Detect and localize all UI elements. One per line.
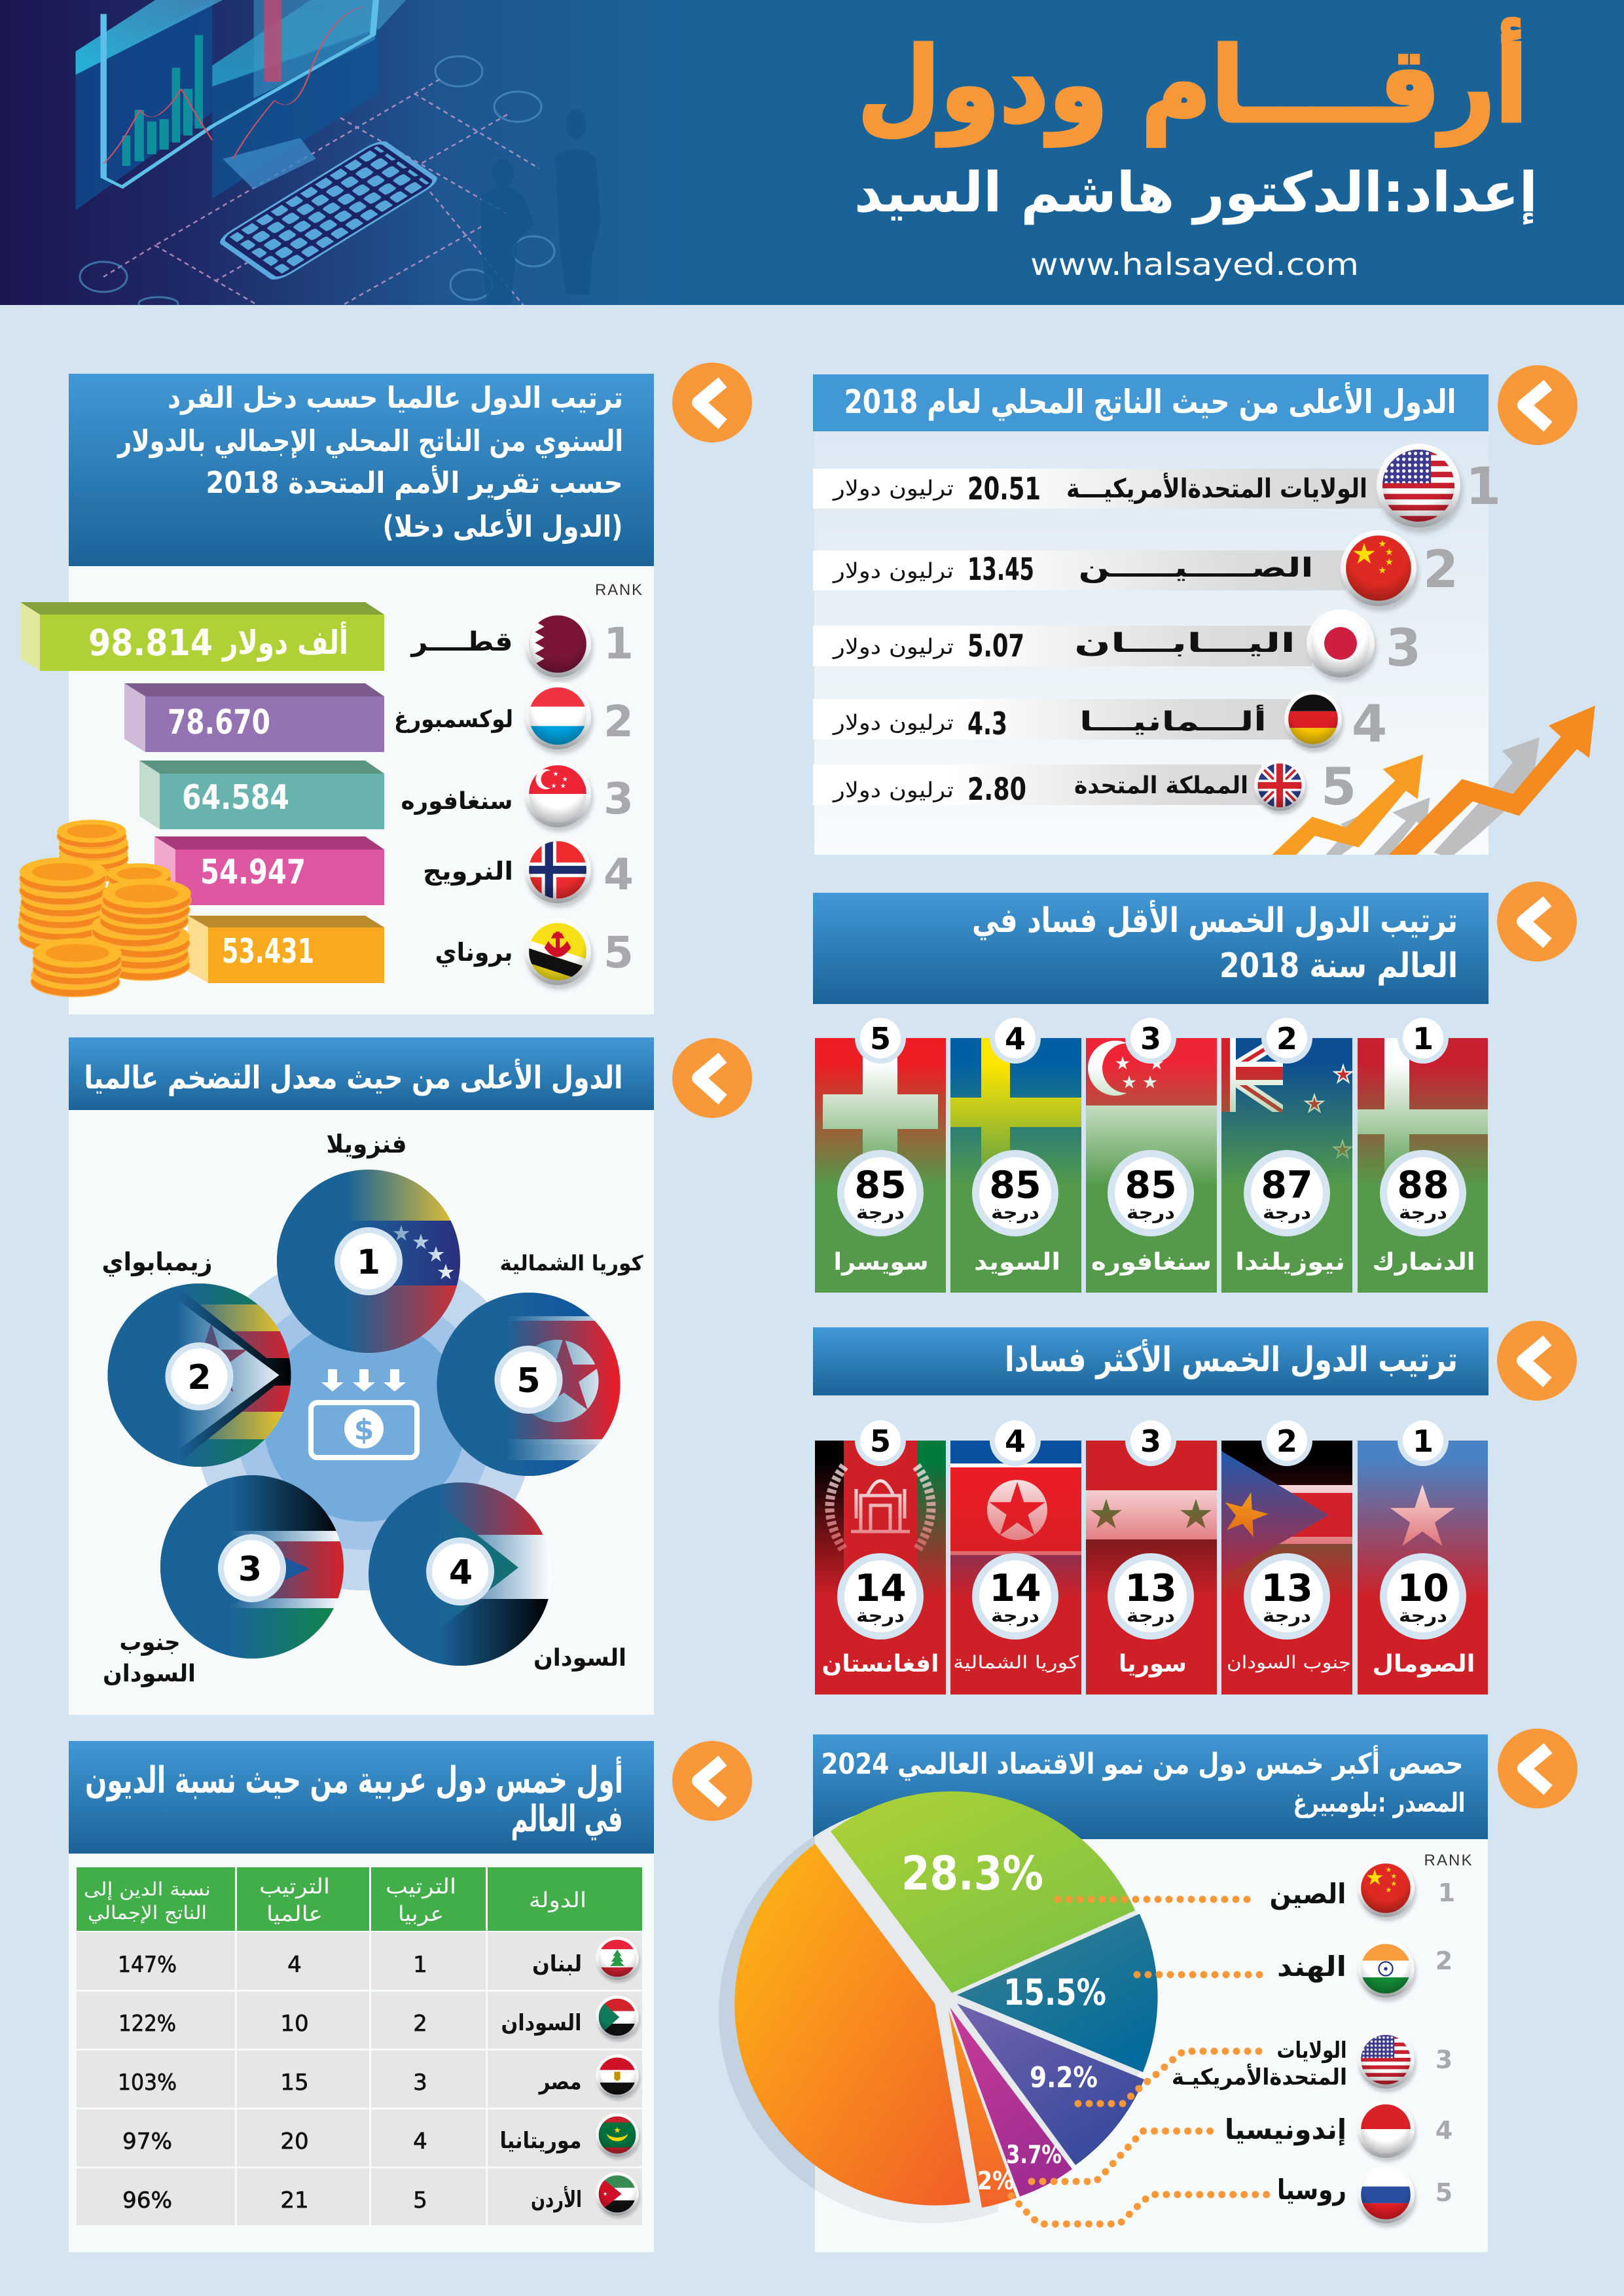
- table header: عالميا: [266, 1901, 323, 1926]
- row 2: [813, 530, 1458, 611]
- label: South Sudan: [103, 1629, 196, 1687]
- row 5: [813, 758, 1356, 817]
- row 2: 13.45: [967, 552, 1034, 588]
- row: Mauritania: 20: [280, 2128, 309, 2155]
- row 2: 2: [1423, 541, 1458, 600]
- icon: chevron: [1498, 1729, 1578, 1808]
- heading: [813, 893, 1489, 1004]
- heading: الدول الأعلى من حيث الناتج المحلي لعام 2018: [844, 382, 1456, 422]
- table header: عربيا: [398, 1901, 444, 1926]
- circle: Venezuela: 1: [357, 1243, 380, 1282]
- pie chart: 9.2%: [1030, 2061, 1098, 2094]
- card: Somalia: الصومال: [1372, 1651, 1475, 1677]
- card: Afghanistan: [815, 1415, 946, 1695]
- row: Brunei: 5: [604, 927, 634, 978]
- row: Mauritania: 97%: [122, 2128, 172, 2155]
- card: Sweden: [950, 1013, 1081, 1293]
- card: Sweden: درجة: [991, 1202, 1039, 1223]
- row: Russia: [1277, 2166, 1453, 2227]
- bar: Qatar: ألف دولار: [221, 621, 348, 662]
- row: Russia: 5: [1435, 2178, 1453, 2207]
- row 4: [813, 691, 1387, 754]
- card: Sweden: 4: [1005, 1021, 1026, 1056]
- panel: Arab debt table: [69, 1741, 752, 2252]
- row: Mauritania: [77, 2109, 642, 2166]
- row: Sudan: [77, 1992, 642, 2049]
- row: Sudan: 2: [413, 2011, 427, 2037]
- panel: least corrupt: [813, 882, 1577, 1293]
- card: Sweden: 85: [989, 1164, 1041, 1207]
- row: Mauritania: 4: [413, 2128, 427, 2155]
- card: Singapore: 3: [1140, 1021, 1161, 1056]
- label: Venezuela: فنزويلا: [326, 1130, 407, 1159]
- card: Switzerland: 5: [870, 1021, 891, 1056]
- circle: Sudan: 4: [449, 1553, 473, 1592]
- bar: Singapore: [139, 761, 384, 829]
- icon: coins: [18, 819, 191, 997]
- row 2: ترليون دولار: [832, 558, 954, 583]
- card: South Sudan: درجة: [1263, 1605, 1311, 1626]
- card: New Zealand: [1221, 1013, 1352, 1293]
- heading: حصص أكبر خمس دول من نمو الاقتصاد العالمي 2024: [821, 1745, 1464, 1781]
- label: North Korea: كوريا الشمالية: [500, 1251, 643, 1276]
- row: Egypt: 15: [280, 2070, 309, 2096]
- row 4: 4: [1352, 695, 1387, 754]
- row: Jordan: 96%: [122, 2187, 172, 2214]
- row 4: ألـــمانيـــا: [1079, 704, 1267, 737]
- row: Norway: 4: [604, 850, 634, 900]
- row: Lebanon: [77, 1932, 642, 1990]
- row 1: ترليون دولار: [832, 476, 954, 501]
- bar: Brunei: 53.431: [222, 932, 314, 971]
- table header: نسبة الدين إلى: [84, 1878, 211, 1900]
- card: Syria: درجة: [1127, 1605, 1175, 1626]
- row: China: الصين: [1270, 1878, 1346, 1910]
- card: Switzerland: درجة: [856, 1202, 905, 1223]
- row 1: الولايات المتحدةالأمريكيـــة: [1066, 472, 1367, 504]
- row 5: 2.80: [967, 772, 1026, 808]
- heading: (الدول الأعلى دخلا): [382, 509, 623, 544]
- card: New Zealand: 2: [1276, 1021, 1297, 1056]
- row: Lebanon: 4: [287, 1952, 302, 1978]
- card: North Korea: [950, 1415, 1081, 1695]
- icon: chevron: [1497, 1321, 1577, 1401]
- card: Switzerland: سويسرا: [834, 1249, 928, 1276]
- card: North Korea: كوريا الشمالية: [953, 1653, 1079, 1673]
- row: Jordan: [77, 2168, 642, 2225]
- row 2: الصـــــيـــــن: [1079, 553, 1313, 583]
- label: South Sudan: جنوب: [119, 1629, 181, 1656]
- row: Egypt: مصر: [538, 2069, 581, 2095]
- row: Sudan: 10: [280, 2011, 309, 2037]
- row: India: الهند: [1277, 1950, 1346, 1983]
- circle: Zimbabwe: 2: [187, 1358, 211, 1397]
- row: Singapore: سنغافوره: [401, 788, 513, 815]
- panel: most corrupt: [813, 1321, 1577, 1695]
- bar: Singapore: 64.584: [182, 778, 289, 817]
- heading: ترتيب الدول الخمس الأكثر فسادا: [1005, 1338, 1458, 1380]
- bar: Brunei: [188, 916, 384, 983]
- circle: Sudan: [369, 1482, 552, 1666]
- card: Syria: سوريا: [1119, 1651, 1187, 1677]
- circle: North Korea: [437, 1293, 621, 1476]
- pie chart: 28.3%: [901, 1846, 1043, 1901]
- panel: inflation: [69, 1037, 752, 1715]
- heading: حسب تقرير الأمم المتحدة 2018: [206, 465, 623, 500]
- bar: Luxembourg: [124, 683, 384, 752]
- row: India: 2: [1435, 1946, 1453, 1975]
- pie chart: 15.5%: [1003, 1971, 1106, 2013]
- row 3: [813, 609, 1421, 682]
- label: South Sudan: السودان: [103, 1660, 196, 1687]
- card: Syria: 3: [1140, 1424, 1161, 1459]
- bar: Qatar: 98.814: [88, 622, 213, 664]
- card: Singapore: [1086, 1013, 1217, 1293]
- row: India: [1277, 1940, 1453, 2001]
- heading: ترتيب الدول عالميا حسب دخل الفرد: [168, 380, 623, 415]
- card: Switzerland: 85: [854, 1164, 907, 1207]
- card: South Sudan: 2: [1276, 1424, 1297, 1459]
- rings: [194, 1250, 535, 1590]
- circle: North Korea: 5: [516, 1361, 541, 1401]
- title: أرقــــام ودول: [857, 18, 1528, 147]
- row: Sudan: السودان: [501, 2010, 581, 2036]
- card: Somalia: 10: [1397, 1567, 1449, 1610]
- rank label: RANK: [595, 581, 642, 599]
- circle: South Sudan: 3: [238, 1550, 262, 1589]
- card: South Sudan: [1218, 1415, 1352, 1695]
- table header: الناتج الإجمالي: [88, 1902, 207, 1924]
- icon: keyboard: [219, 140, 439, 281]
- panel: shares of global growth: [719, 1729, 1578, 2252]
- label: Zimbabwe: زيمبابواي: [102, 1247, 212, 1276]
- card: Afghanistan: افغانستان: [822, 1651, 939, 1677]
- row: Egypt: 3: [413, 2070, 427, 2096]
- card: Singapore: درجة: [1127, 1202, 1175, 1223]
- card: South Sudan: 13: [1261, 1567, 1313, 1610]
- heading: [813, 1734, 1488, 1839]
- row: Jordan: 21: [280, 2187, 309, 2214]
- icon: chevron: [1498, 365, 1578, 445]
- row: Luxembourg: [394, 683, 634, 754]
- author line: إعداد:الدكتور هاشم السيد: [854, 160, 1538, 225]
- card: North Korea: درجة: [991, 1605, 1039, 1626]
- panel: income per capita: [18, 363, 752, 1014]
- row: Brunei: بروناي: [435, 938, 513, 967]
- row 3: 3: [1386, 619, 1421, 678]
- row 4: 4.3: [967, 706, 1007, 742]
- row: USA: [1172, 2031, 1453, 2092]
- row: Luxembourg: 2: [604, 696, 634, 747]
- card: Somalia: درجة: [1399, 1605, 1447, 1626]
- row: USA: المتحدةالأمريكيـة: [1172, 2063, 1347, 2090]
- row: Norway: النرويج: [423, 857, 513, 886]
- card: Denmark: 88: [1397, 1164, 1449, 1207]
- card: Singapore: 85: [1125, 1164, 1177, 1207]
- bar: Norway: [154, 836, 384, 905]
- pie chart: 2%: [977, 2166, 1014, 2195]
- card: Singapore: سنغافوره: [1091, 1249, 1212, 1276]
- row: Singapore: [401, 761, 634, 832]
- leader lines: [1011, 1899, 1271, 2224]
- row: Qatar: قطــــر: [410, 627, 513, 657]
- card: North Korea: 14: [989, 1567, 1041, 1610]
- row 3: ترليون دولار: [832, 634, 954, 659]
- row: Jordan: 5: [413, 2187, 427, 2214]
- card: Afghanistan: درجة: [856, 1605, 905, 1626]
- heading: [813, 1327, 1489, 1395]
- row: Luxembourg: لوكسمبورغ: [394, 706, 513, 733]
- card: Sweden: السويد: [974, 1249, 1060, 1276]
- row 5: ترليون دولار: [832, 778, 954, 802]
- row: Indonesia: 4: [1435, 2116, 1453, 2145]
- row: Egypt: [77, 2051, 642, 2108]
- heading: [813, 374, 1489, 431]
- row: Lebanon: لبنان: [532, 1951, 582, 1977]
- row: Indonesia: إندونيسيا: [1225, 2113, 1346, 2146]
- row 5: 5: [1321, 758, 1356, 817]
- table header: الدولة: [529, 1888, 586, 1912]
- card: Afghanistan: 14: [854, 1567, 907, 1610]
- heading: [69, 374, 654, 566]
- row: Qatar: 1: [604, 619, 634, 669]
- icon: chevron: [672, 1038, 752, 1118]
- row: Lebanon: 1: [413, 1952, 427, 1978]
- arrows: growth: [1272, 706, 1595, 855]
- row 1: 20.51: [967, 471, 1041, 507]
- pie chart: 3.7%: [1006, 2140, 1062, 2169]
- card: Denmark: [1358, 1013, 1488, 1293]
- heading: المصدر :بلومبيرغ: [1293, 1788, 1465, 1818]
- circle: Zimbabwe: [107, 1283, 291, 1467]
- icon: business people: [481, 109, 601, 306]
- row: Russia: روسيا: [1277, 2174, 1346, 2206]
- heading: [69, 1037, 654, 1110]
- row: China: [1270, 1859, 1455, 1921]
- card: Syria: 13: [1125, 1567, 1177, 1610]
- heading: ترتيب الدول الخمس الأقل فساد في: [972, 899, 1458, 941]
- row 1: [813, 444, 1501, 533]
- illustration: data dashboards, keyboard and business people: [75, 0, 601, 310]
- header banner: [0, 0, 1624, 310]
- heading: العالم سنة 2018: [1219, 946, 1458, 986]
- pie chart: [719, 1791, 1158, 2223]
- card: Syria: [1086, 1415, 1217, 1695]
- card: North Korea: 4: [1005, 1424, 1026, 1459]
- icon: money: [311, 1369, 417, 1458]
- card: Somalia: [1358, 1415, 1488, 1695]
- row: Norway: [423, 836, 634, 908]
- heading: السنوي من الناتج المحلي الإجمالي بالدولار: [117, 423, 623, 458]
- icon: chevron: [1497, 882, 1577, 961]
- row 5: المملكة المتحدة: [1074, 772, 1248, 799]
- row: USA: 3: [1435, 2045, 1453, 2074]
- icon: chevron: [672, 363, 752, 442]
- row: Lebanon: 147%: [118, 1952, 177, 1978]
- circle: Venezuela: [277, 1170, 460, 1353]
- card: Somalia: 1: [1413, 1424, 1434, 1459]
- rank label: RANK: [1424, 1852, 1471, 1869]
- row 1: 1: [1466, 457, 1501, 516]
- bar: Norway: 54.947: [200, 853, 306, 892]
- card: Denmark: 1: [1413, 1021, 1434, 1056]
- website: www.halsayed.com: [1030, 247, 1359, 282]
- row: Indonesia: [1225, 2100, 1453, 2162]
- table header: [77, 1867, 642, 1931]
- heading: في العالم: [511, 1798, 623, 1840]
- heading: أول خمس دول عربية من حيث نسبة الديون: [85, 1756, 623, 1802]
- row: USA: الولايات: [1276, 2037, 1347, 2064]
- row 4: ترليون دولار: [832, 710, 954, 735]
- heading: الدول الأعلى من حيث معدل التضخم عالميا: [84, 1058, 623, 1096]
- row: Mauritania: موريتانيا: [500, 2128, 581, 2154]
- card: New Zealand: درجة: [1263, 1202, 1311, 1223]
- icon: money: $: [354, 1413, 374, 1446]
- row 3: 5.07: [967, 628, 1024, 664]
- bar: Qatar: [20, 602, 384, 671]
- card: South Sudan: جنوب السودان: [1227, 1653, 1351, 1673]
- row: Brunei: [435, 918, 634, 990]
- card: Denmark: درجة: [1399, 1202, 1447, 1223]
- row 3: اليـــابـــان: [1074, 628, 1295, 658]
- card: New Zealand: 87: [1261, 1164, 1313, 1207]
- row: Egypt: 103%: [118, 2070, 177, 2096]
- row: Sudan: 122%: [118, 2011, 176, 2037]
- card: Afghanistan: 5: [870, 1424, 891, 1459]
- row: China: 1: [1438, 1878, 1455, 1907]
- icon: chevron: [672, 1741, 752, 1821]
- row: Qatar: [410, 611, 634, 682]
- bar: Luxembourg: 78.670: [168, 703, 270, 742]
- circle: South Sudan: [160, 1475, 344, 1659]
- table header: الترتيب: [259, 1874, 330, 1899]
- card: Denmark: الدنمارك: [1372, 1249, 1475, 1276]
- panel: highest GDP 2018: [813, 365, 1595, 855]
- card: New Zealand: نيوزيلندا: [1235, 1249, 1345, 1276]
- table header: الترتيب: [386, 1874, 456, 1899]
- heading: [69, 1741, 654, 1854]
- label: Sudan: السودان: [533, 1645, 626, 1672]
- row: Jordan: الأردن: [531, 2185, 582, 2213]
- row: Singapore: 3: [604, 774, 634, 824]
- card: Switzerland: [815, 1013, 946, 1293]
